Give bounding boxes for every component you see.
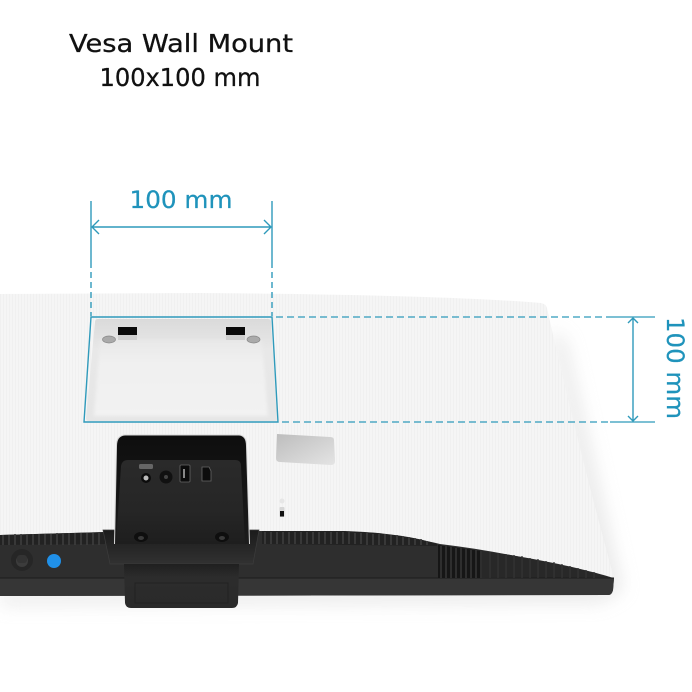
side vents bbox=[438, 545, 482, 578]
bottom lip bbox=[0, 578, 614, 596]
title: Vesa Wall Mount bbox=[69, 29, 293, 58]
slots bbox=[118, 327, 137, 335]
monitor: dark lower housing bbox=[0, 531, 614, 596]
screws bbox=[102, 336, 116, 343]
lock slot bbox=[280, 498, 284, 517]
ports bbox=[139, 464, 153, 469]
stand foot block bbox=[124, 564, 239, 608]
port bay bbox=[114, 434, 250, 544]
screw holes bbox=[134, 532, 148, 542]
dimension: horizontal 100 mm bbox=[91, 201, 272, 316]
control joystick bbox=[11, 549, 33, 571]
monitor: soft shadow bbox=[0, 330, 622, 604]
label: 100 mm vertical: 100 mm bbox=[661, 317, 689, 419]
VESA recess bbox=[86, 319, 277, 421]
port plate bbox=[116, 460, 245, 544]
stand mount base bbox=[103, 530, 259, 564]
title bbox=[69, 29, 293, 92]
vent ribs bbox=[0, 531, 437, 546]
dimension: vertical 100 mm bbox=[84, 317, 655, 422]
blue power button bbox=[47, 554, 61, 568]
title: 100x100 mm bbox=[100, 63, 260, 92]
monitor: white rear panel bbox=[0, 293, 614, 578]
label: 100 mm horizontal: 100 mm bbox=[130, 186, 232, 214]
sticker patch bbox=[276, 434, 335, 465]
